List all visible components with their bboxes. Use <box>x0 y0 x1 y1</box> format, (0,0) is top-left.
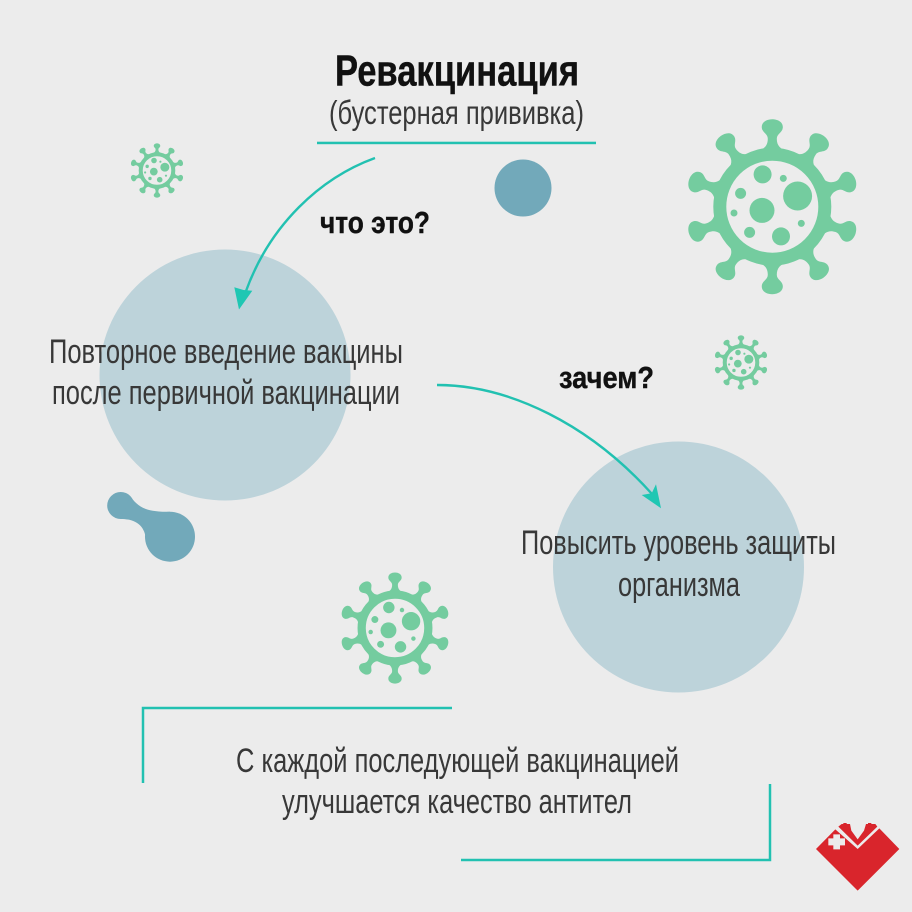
decorative blue circle <box>494 160 552 216</box>
title underline <box>317 142 596 144</box>
definition text: после первичной вакцинации <box>52 374 400 412</box>
title: Ревакцинация <box>335 46 579 96</box>
purpose text <box>521 524 836 604</box>
callout text <box>236 742 679 821</box>
purpose text: организма <box>618 566 740 604</box>
arrow: title to definition <box>234 158 375 310</box>
title <box>329 46 584 131</box>
definition text <box>49 333 403 412</box>
question: why: зачем? <box>559 360 654 395</box>
icon: small virus right <box>714 335 768 390</box>
icon: logo heart <box>816 823 899 891</box>
arrow: definition to purpose <box>437 385 661 508</box>
callout text: С каждой последующей вакцинацией <box>236 742 679 780</box>
icon: medium virus <box>339 572 451 684</box>
large pale circle: what it is <box>100 250 350 500</box>
icon: large virus <box>684 119 860 294</box>
large pale circle: why <box>553 442 804 692</box>
callout text: улучшается качество антител <box>282 783 632 821</box>
callout frame <box>143 708 770 860</box>
question: what is it: что это? <box>320 205 430 240</box>
icon: small virus top left <box>130 143 184 198</box>
definition text: Повторное введение вакцины <box>49 333 403 371</box>
title: (бустерная прививка) <box>329 94 584 131</box>
decorative blue blob <box>107 492 195 562</box>
